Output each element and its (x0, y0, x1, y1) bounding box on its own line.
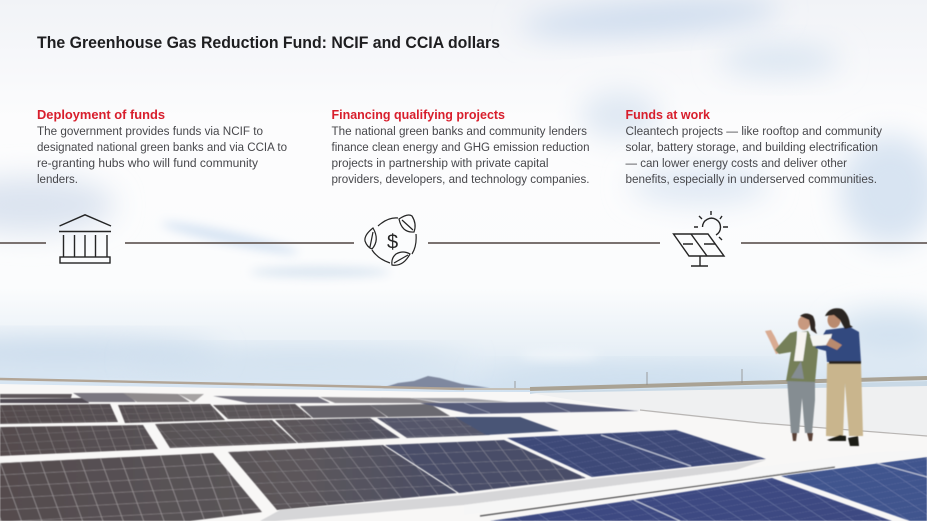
body text: finance clean energy and GHG emission reduction (332, 140, 590, 154)
far row panels (0, 393, 510, 403)
body text: The national green banks and community lenders (332, 124, 587, 138)
body text (626, 124, 883, 186)
man (810, 308, 863, 446)
column 2: financing qualifying projects (332, 107, 590, 186)
body text (332, 124, 590, 186)
body text: The government provides funds via NCIF to (37, 124, 263, 138)
title: The Greenhouse Gas Reduction Fund: NCIF and CCIA dollars (37, 34, 500, 52)
body text: lenders. (37, 172, 78, 186)
woman (765, 314, 818, 441)
body text: benefits, especially in underserved communities. (626, 172, 877, 186)
timeline line (0, 242, 927, 244)
body text (37, 124, 287, 186)
body text: solar, battery storage, and building electrification (626, 140, 878, 154)
body text: re-granting hubs who will fund community (37, 156, 259, 170)
front row panels (0, 430, 766, 521)
icon: bank (59, 215, 111, 263)
row two panels (0, 417, 559, 456)
heading: Funds at work (626, 107, 711, 122)
background photo: sky (0, 0, 927, 400)
solar panels array (0, 393, 927, 521)
body text: Cleantech projects — like rooftop and community (626, 124, 883, 138)
heading: Financing qualifying projects (332, 107, 505, 122)
column 1: deployment of funds (37, 107, 287, 186)
body text: projects in partnership with private capital (332, 156, 548, 170)
row three panels (0, 402, 639, 424)
rails (260, 450, 927, 521)
background photo: mountain (382, 376, 490, 388)
body text: providers, developers, and technology companies. (332, 172, 590, 186)
icon: solar panel and sun (674, 211, 728, 266)
icon: leaves and dollar cycle (365, 215, 416, 265)
right front panels (490, 457, 927, 521)
icon: leaves and dollar cycle: $ (387, 232, 398, 254)
column 3: funds at work (626, 107, 883, 186)
two people on the roof (765, 308, 863, 446)
heading: Deployment of funds (37, 107, 165, 122)
body text: designated national green banks and via CCIA to (37, 140, 287, 154)
background photo: roof and parapet (0, 369, 927, 521)
body text: — can lower energy costs and deliver other (626, 156, 847, 170)
